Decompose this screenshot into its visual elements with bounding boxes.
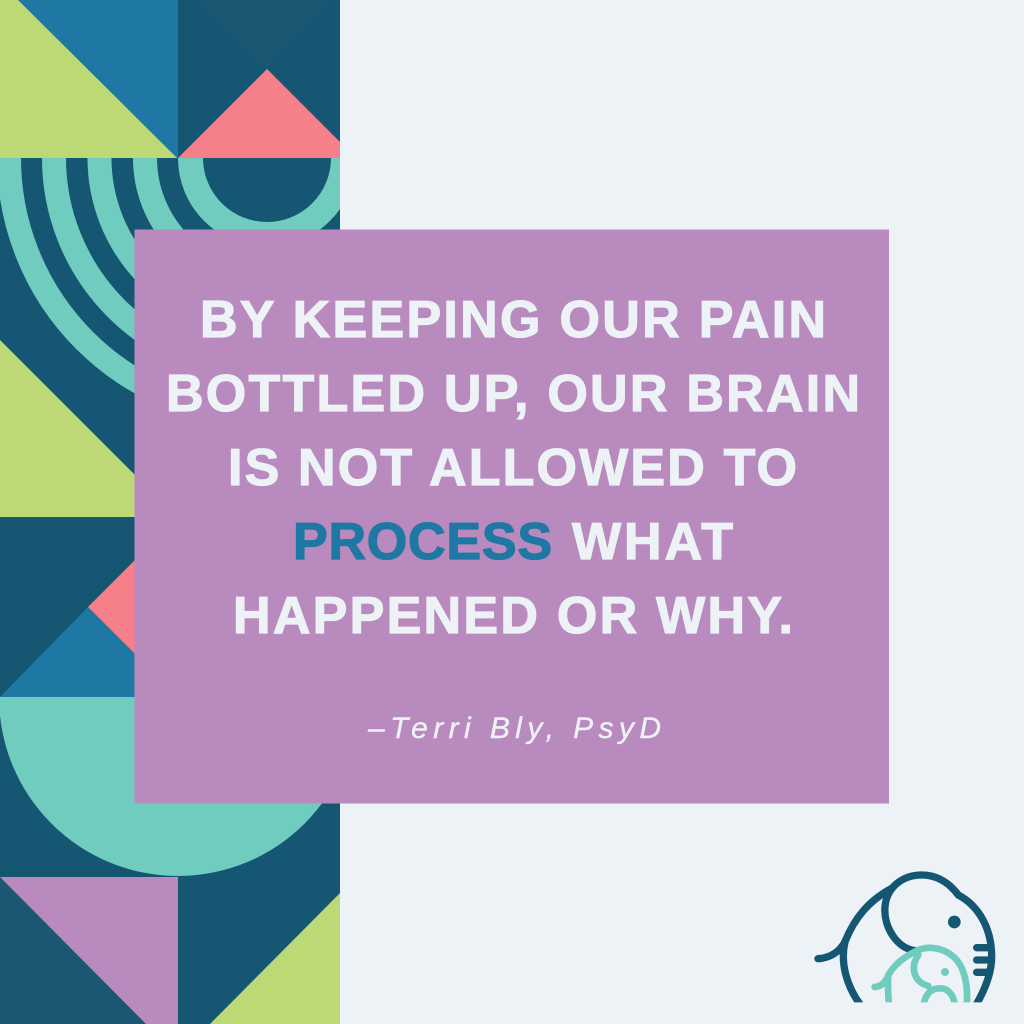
icon: parent elephant <box>818 875 992 1007</box>
quote text: BOTTLED UP, OUR BRAIN <box>166 365 860 423</box>
tile: green corner triangle <box>210 893 340 1024</box>
icon: elephant logo <box>818 875 992 1007</box>
tile: pink and blue triangles <box>0 517 178 697</box>
icon: baby elephant <box>875 948 967 1007</box>
quote text: BY KEEPING OUR PAIN <box>200 291 826 349</box>
tile: teal half circle <box>0 697 322 876</box>
tile: green triangle <box>0 340 177 517</box>
tile: green and blue triangles <box>0 0 178 158</box>
tile: purple triangle <box>0 877 178 1024</box>
quote text: WHAT <box>572 513 733 571</box>
quote text: HAPPENED OR WHY. <box>233 587 793 645</box>
quote text: PROCESS <box>293 513 552 571</box>
panel: geometric pattern <box>0 0 340 1024</box>
quote text: IS NOT ALLOWED TO <box>228 439 797 497</box>
attribution: –Terri Bly, PsyD <box>367 712 661 745</box>
quote text <box>166 291 860 645</box>
tile: pink triangle <box>178 0 340 158</box>
tile: concentric rings <box>0 158 340 394</box>
panel: quote card <box>134 230 889 804</box>
